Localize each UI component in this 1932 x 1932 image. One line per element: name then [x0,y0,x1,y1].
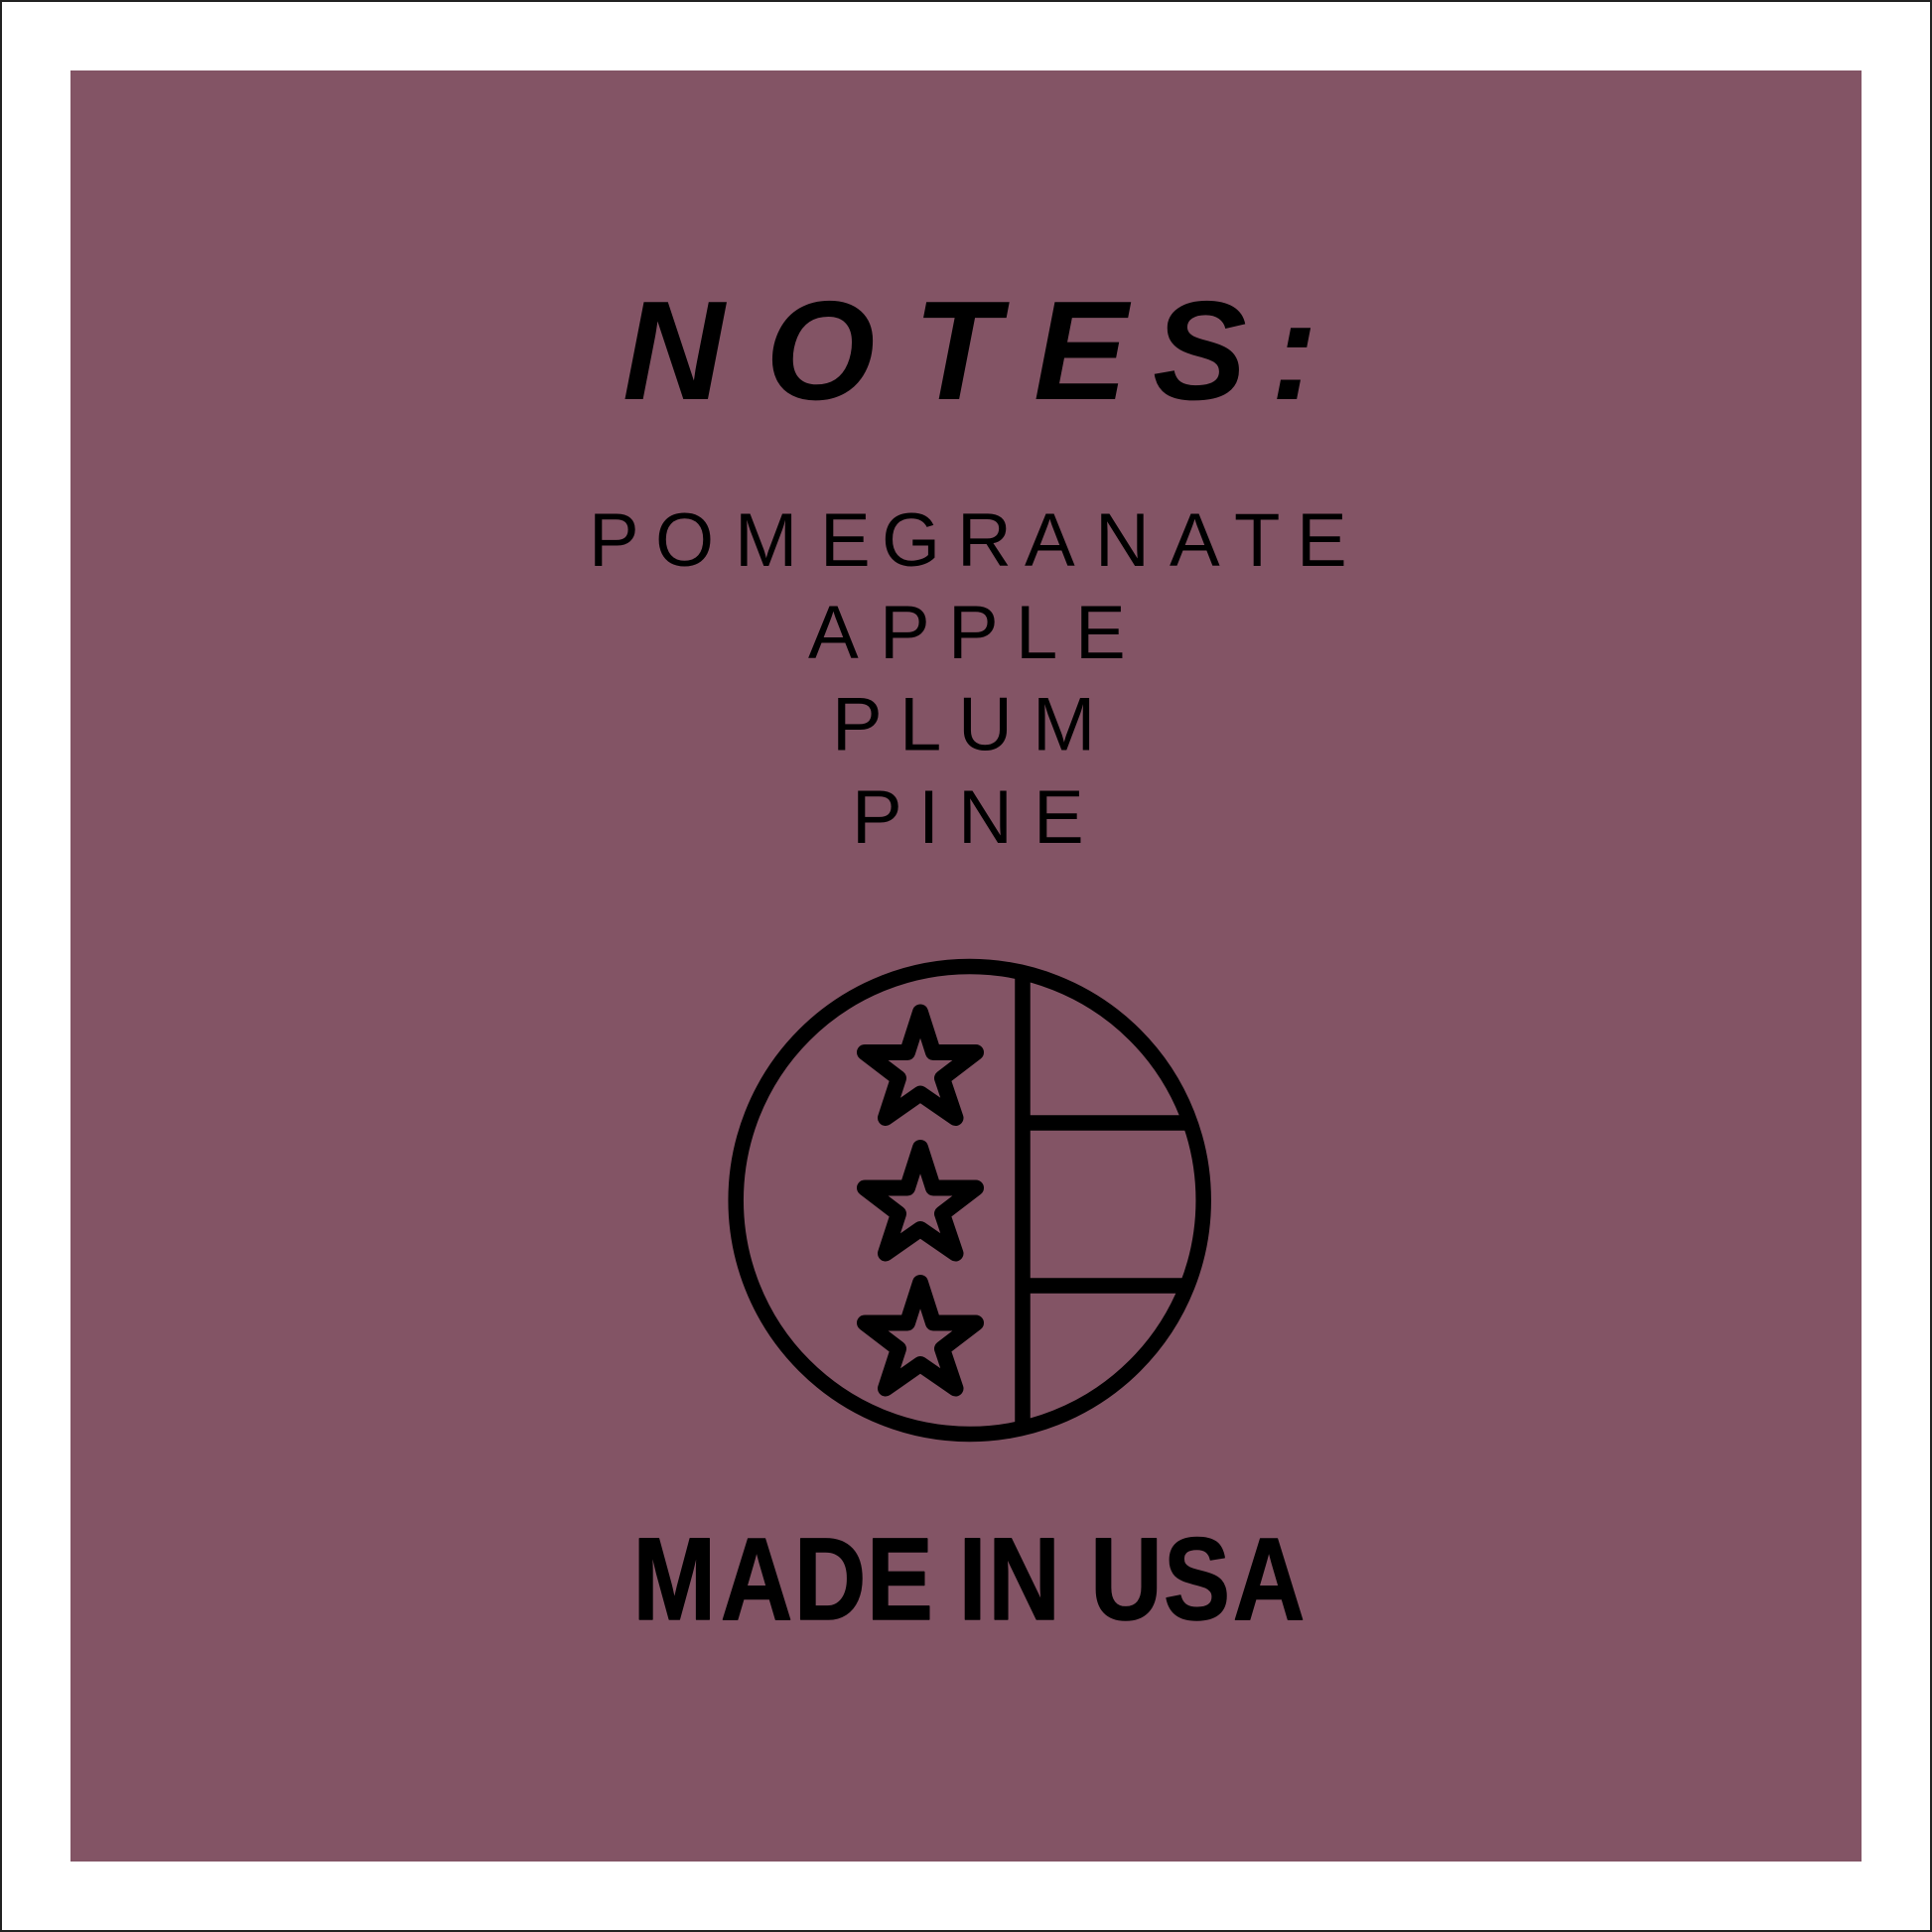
note: pine: PINE [852,775,1084,860]
label: made in usa: MADE IN USA [633,1514,1305,1645]
note: plum: PLUM [832,683,1095,766]
note: pomegranate: POMEGRANATE [589,498,1347,583]
icon: circle with stars and stripes [736,967,1203,1434]
icon: star bottom [865,1283,976,1388]
note: apple: APPLE [808,591,1126,675]
icon: star middle [865,1148,976,1253]
icon: star top [865,1013,976,1118]
title: notes: NOTES: [622,272,1317,430]
text block: list of notes [589,498,1347,860]
